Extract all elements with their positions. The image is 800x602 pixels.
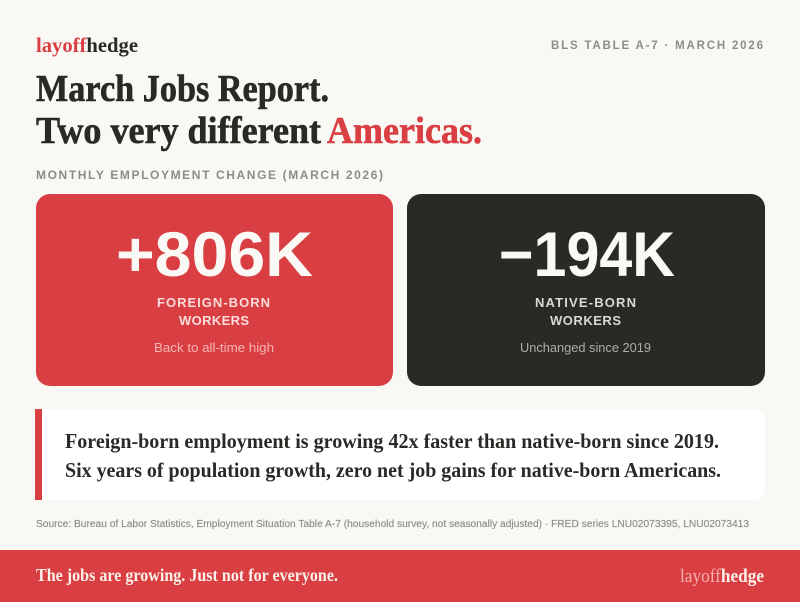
logo: layoffhedge: layoffhedge — [36, 33, 138, 57]
title: March Jobs Report. — [36, 68, 329, 110]
title — [36, 68, 482, 152]
footer logo: layoffhedge — [680, 566, 764, 587]
label: native-born workers — [535, 295, 636, 328]
header source tag: BLS TABLE A-7 · MARCH 2026 — [551, 40, 763, 52]
panel: foreign-born workers — [36, 194, 393, 386]
panel: native-born workers — [407, 194, 765, 386]
title: Two very different — [36, 110, 321, 152]
callout text: Six years of population growth, zero net job gains for native-born Americans. — [65, 458, 721, 482]
label: foreign-born workers: WORKERS — [179, 313, 249, 328]
callout — [35, 409, 765, 500]
section label: MONTHLY EMPLOYMENT CHANGE (MARCH 2026) — [36, 168, 383, 182]
label: foreign-born workers — [157, 295, 270, 328]
source note: Source: Bureau of Labor Statistics, Employment Situation Table A-7 (household survey, not seasonally adjusted) · FRED series LNU02073395, LNU02073413 — [36, 519, 749, 530]
label: foreign-born workers: FOREIGN-BORN — [157, 295, 270, 310]
callout text: Foreign-born employment is growing 42x faster than native-born since 2019. — [65, 429, 719, 453]
callout text — [65, 429, 721, 482]
note: unchanged since 2019: Unchanged since 2019 — [520, 340, 651, 355]
title: Americas. — [327, 110, 482, 152]
figure: +806K: +806K — [116, 220, 313, 290]
footer banner — [0, 550, 800, 602]
footer tagline: The jobs are growing. Just not for everyone. — [36, 565, 338, 585]
label: native-born workers: NATIVE-BORN — [535, 295, 636, 310]
note: back to all-time high: Back to all-time high — [154, 340, 274, 355]
label: native-born workers: WORKERS — [550, 313, 621, 328]
figure: -194K: −194K — [499, 220, 675, 290]
